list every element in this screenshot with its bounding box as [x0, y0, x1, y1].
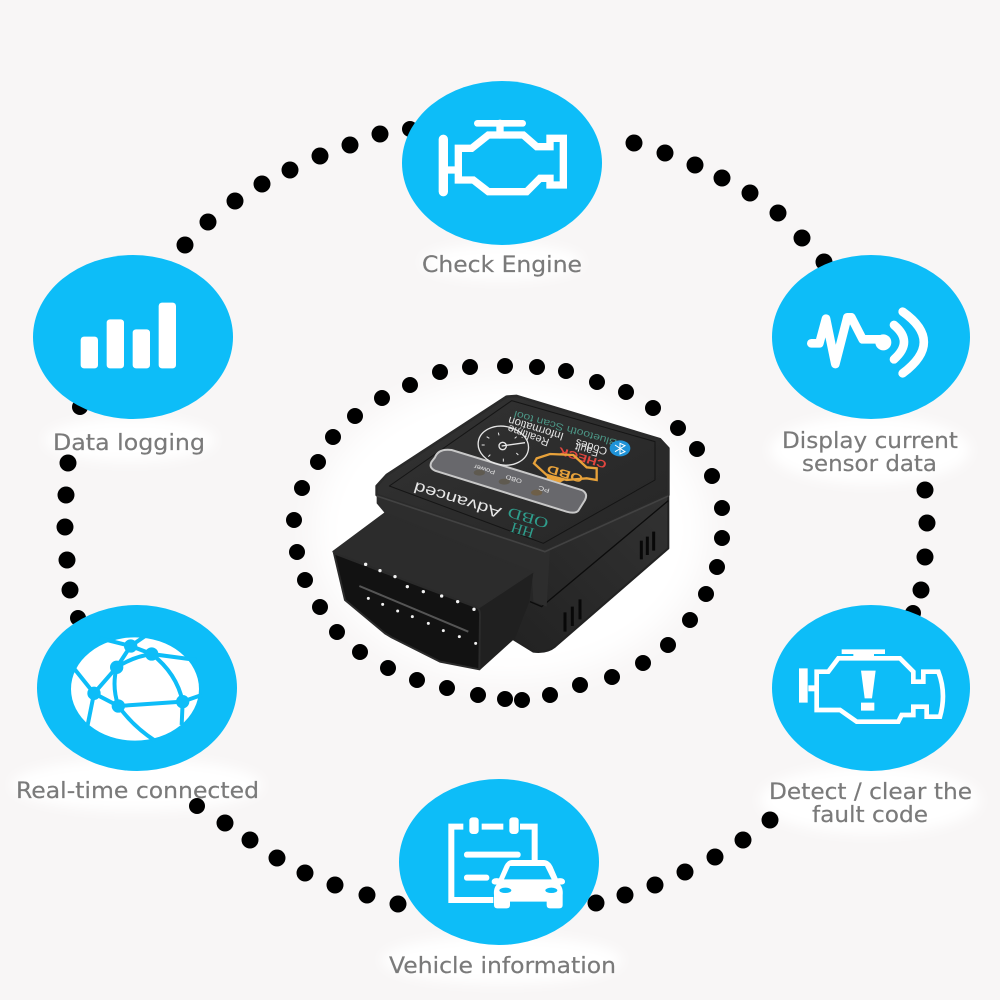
device OBD engine symbol	[534, 454, 597, 484]
device LED panel	[431, 450, 586, 513]
panel: data logging	[33, 255, 233, 456]
device OBD engine symbol: OBD	[546, 462, 585, 484]
device info text: Information	[507, 414, 565, 442]
icon: engine warning	[803, 652, 943, 722]
device info text: Bluetooth Scan tool	[513, 408, 618, 448]
device LED panel: Power	[473, 462, 496, 474]
device brand text: HH	[509, 518, 536, 540]
device gauge	[475, 422, 532, 469]
circle: real-time connected	[37, 605, 237, 771]
panel: fault code	[769, 605, 972, 828]
OBD device photo	[333, 396, 668, 670]
device info text: CHECK	[557, 444, 608, 470]
panel: vehicle information	[389, 779, 616, 979]
icon: pulse signal	[811, 312, 924, 373]
device body	[377, 396, 668, 652]
circle: vehicle information	[399, 779, 599, 945]
device info text: Realtime	[506, 422, 551, 448]
label: sensor data: sensor data	[802, 452, 937, 477]
device info text	[506, 408, 618, 470]
label: vehicle information: Vehicle information	[389, 954, 616, 979]
circle: data logging	[33, 255, 233, 419]
label: fault code: fault code	[812, 803, 928, 828]
device info text: Codes	[574, 436, 609, 457]
device info text: Fault	[574, 440, 600, 459]
label: fault code	[769, 780, 972, 828]
circle: fault code	[772, 605, 970, 771]
icon: bar chart	[81, 303, 176, 368]
device brand text: OBD	[506, 503, 551, 531]
label: real-time connected: Real-time connected	[16, 779, 259, 804]
circle: sensor data	[772, 255, 970, 419]
device connector	[333, 513, 533, 670]
outer dotted ring	[56, 121, 936, 912]
label: sensor data	[782, 429, 958, 477]
label: data logging: Data logging	[53, 431, 205, 456]
device LED panel: OBD	[504, 473, 523, 483]
inner dotted ring	[286, 358, 730, 708]
device bluetooth badge	[610, 440, 630, 456]
label: sensor data: Display current	[782, 429, 958, 454]
circle: check engine	[402, 81, 602, 245]
device brand text	[412, 478, 551, 540]
label: check engine: Check Engine	[422, 253, 582, 278]
icon: network globe	[71, 635, 202, 741]
icon: clipboard and car	[451, 817, 565, 908]
label: fault code: Detect / clear the	[769, 780, 972, 805]
icon: engine	[443, 123, 563, 192]
device brand text: Advanced	[412, 478, 504, 521]
panel: real-time connected	[16, 605, 259, 804]
panel: check engine	[402, 81, 602, 278]
panel: sensor data	[772, 255, 970, 477]
device LED panel: PC	[537, 484, 551, 493]
